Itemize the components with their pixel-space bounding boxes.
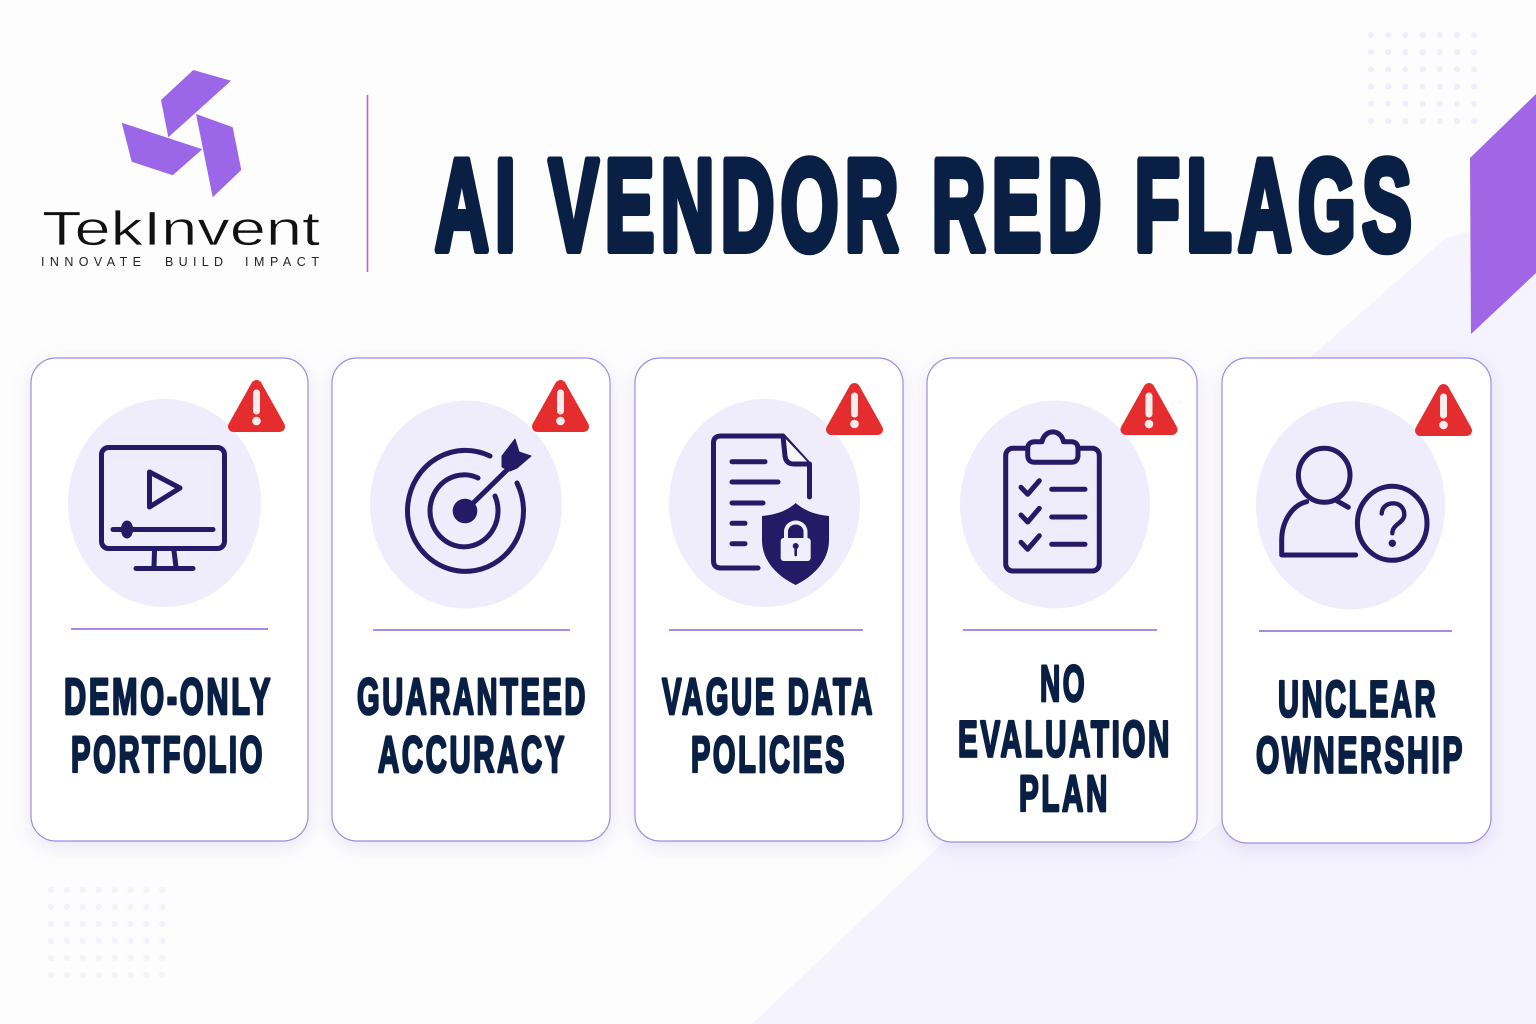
- icon: warning triangle: [1420, 390, 1466, 430]
- label: [357, 668, 588, 783]
- label: [662, 668, 875, 783]
- logo tagline: [41, 255, 319, 269]
- icon: target with arrow: [408, 439, 531, 571]
- label: GUARANTEED: [357, 668, 588, 725]
- icon: warning triangle: [538, 386, 584, 426]
- icon: monitor with video: [102, 448, 224, 568]
- icon: document with shield: [714, 436, 829, 585]
- icon: warning triangle: [1126, 388, 1172, 430]
- background lavender shape: [752, 232, 1536, 1024]
- icon backdrop: [370, 400, 562, 608]
- icon backdrop: [68, 399, 261, 607]
- logo wordmark: TekInvent: [42, 203, 320, 256]
- icon backdrop: [960, 400, 1150, 608]
- panel: demo-only portfolio: [31, 358, 308, 841]
- card frame: [1222, 358, 1491, 843]
- panel: guaranteed accuracy: [332, 358, 610, 841]
- label: DEMO-ONLY: [64, 668, 273, 725]
- divider: [1259, 630, 1452, 632]
- label: POLICIES: [691, 726, 847, 783]
- logo tagline: BUILD: [165, 255, 223, 269]
- card frame: [332, 358, 610, 841]
- logo tagline: INNOVATE: [41, 255, 141, 269]
- logo tagline: IMPACT: [245, 255, 319, 269]
- icon backdrop: [669, 399, 860, 607]
- header divider: [366, 95, 368, 272]
- panel: no evaluation plan: [927, 358, 1197, 842]
- icon: clipboard checklist: [1006, 432, 1099, 571]
- divider: [963, 629, 1157, 631]
- icon backdrop: [1256, 402, 1445, 610]
- label: [64, 668, 273, 783]
- card frame: [635, 358, 903, 841]
- icon: warning triangle: [832, 388, 878, 430]
- divider: [669, 629, 863, 631]
- dot grid top right: [1362, 26, 1483, 130]
- label: PLAN: [1019, 765, 1110, 822]
- icon: warning triangle: [234, 386, 280, 426]
- purple corner accent: [1470, 94, 1536, 334]
- divider: [373, 629, 570, 631]
- label: [1256, 670, 1465, 784]
- label: PORTFOLIO: [71, 726, 265, 783]
- panel: vague data policies: [635, 358, 903, 841]
- card frame: [31, 358, 308, 841]
- divider: [71, 628, 268, 630]
- card frame: [927, 358, 1197, 842]
- label: VAGUE DATA: [662, 668, 875, 725]
- label: NO: [1040, 655, 1087, 712]
- label: EVALUATION: [958, 710, 1172, 768]
- logo: [41, 70, 320, 269]
- panel: unclear ownership: [1222, 358, 1491, 843]
- icon: person with question mark: [1282, 448, 1427, 560]
- label: [958, 655, 1172, 822]
- logo mark: [122, 70, 241, 197]
- dot grid bottom left: [43, 882, 170, 984]
- label: ACCURACY: [378, 726, 567, 783]
